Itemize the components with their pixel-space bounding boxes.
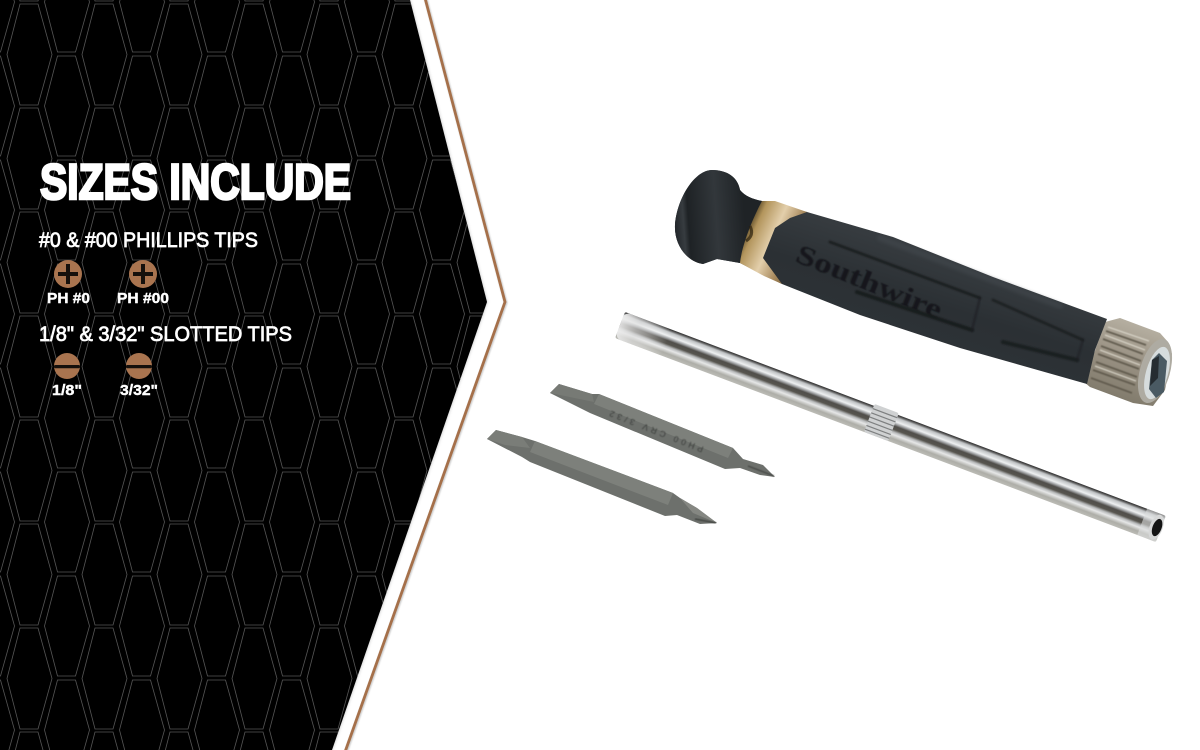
photo: steel shaft bbox=[615, 310, 1168, 543]
photo: double-ended bit PH00 bbox=[550, 384, 775, 477]
heading: sizes include: SIZES INCLUDE bbox=[40, 154, 351, 210]
icon: phillips PH #00 bbox=[129, 260, 157, 288]
handle end cap bbox=[1084, 318, 1179, 407]
knob bbox=[675, 170, 762, 264]
icon: slotted 3/32 bbox=[126, 353, 152, 379]
label: PH #00: PH #00 bbox=[117, 290, 169, 307]
translucent collar bbox=[740, 201, 807, 284]
heading: slotted tips: 1/8" & 3/32" SLOTTED TIPS bbox=[39, 323, 292, 346]
photo: double-ended bit PH00: PH00 CRV 3/32 bbox=[608, 408, 705, 454]
icon: slotted 1/8 bbox=[54, 353, 80, 379]
label: 1/8: 1/8" bbox=[52, 382, 82, 399]
icon: phillips PH #0 bbox=[54, 260, 82, 288]
grip bbox=[675, 170, 1107, 384]
heading: phillips tips: #0 & #00 PHILLIPS TIPS bbox=[39, 229, 258, 252]
label: PH #0: PH #0 bbox=[47, 290, 90, 307]
arrow: copper chevron line bbox=[345, 0, 506, 750]
brand lettering: Southwire bbox=[792, 239, 947, 325]
panel: black hexagon-patterned arrow bbox=[0, 0, 500, 750]
grip recess grooves bbox=[830, 238, 1083, 360]
photo: screwdriver handle bbox=[675, 170, 1179, 407]
photo: double-ended bit PH0 bbox=[487, 430, 717, 524]
label: 3/32: 3/32" bbox=[120, 382, 158, 399]
